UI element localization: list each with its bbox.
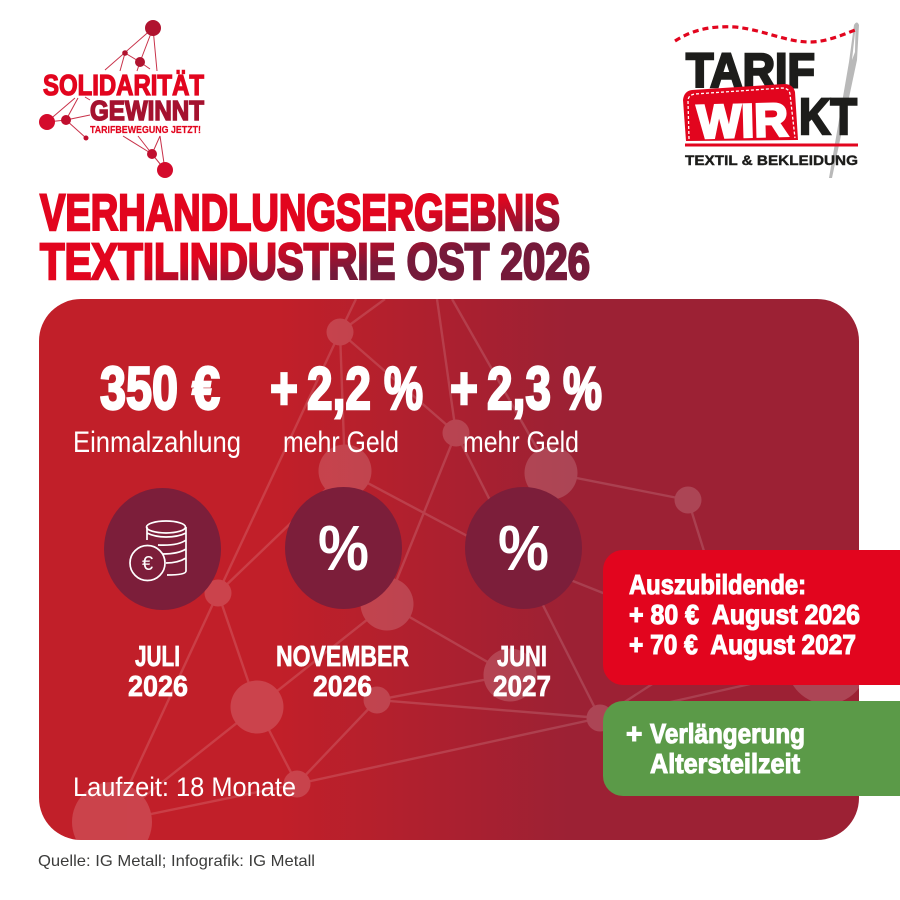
column: June 2027: 2027 [493, 671, 551, 703]
icon: needle [829, 22, 859, 178]
icon: percent [285, 487, 402, 609]
column: November 2026: 2,2 [307, 355, 371, 422]
column: November 2026 [270, 355, 423, 703]
callout: apprentices: Auszubildende: [629, 569, 806, 600]
column: June 2027: mehr Geld [463, 426, 579, 459]
column: July 2026: € [192, 355, 220, 422]
column: November 2026: + [270, 355, 298, 422]
callout: apprentices [603, 550, 900, 685]
panel: main result [39, 299, 867, 862]
column: June 2027: + [450, 355, 478, 422]
logo: Tarif wirkt: TEXTIL & BEKLEIDUNG [685, 152, 858, 168]
column: June 2027 [450, 355, 602, 703]
callout: partial retirement [603, 701, 900, 796]
logo: Solidarität gewinnt: TARIFBEWEGUNG JETZT! [90, 125, 201, 136]
icon: percent: % [498, 512, 549, 584]
column: July 2026: 2026 [128, 671, 188, 703]
network background [72, 299, 867, 862]
column: November 2026: 2026 [313, 671, 372, 703]
column: June 2027: 2,3 [487, 355, 551, 422]
logo: Tarif wirkt [675, 22, 859, 178]
logo: Solidarität gewinnt: SOLIDARITÄT [43, 69, 204, 102]
icon: percent: % [318, 512, 369, 584]
callout: partial retirement: Altersteilzeit [650, 748, 800, 779]
logo: Tarif wirkt: KT [799, 88, 857, 145]
column: July 2026: JULI [135, 641, 180, 673]
column: June 2027: JUNI [497, 641, 547, 673]
source note: Quelle: IG Metall; Infografik: IG Metall [38, 853, 315, 870]
column: November 2026: % [384, 355, 423, 422]
logo: Solidarität gewinnt: GEWINNT [90, 95, 204, 126]
column: November 2026: NOVEMBER [276, 641, 409, 673]
logo: Tarif wirkt: WIR [696, 93, 789, 148]
title [40, 184, 590, 290]
column: July 2026 [73, 355, 241, 703]
column: July 2026: Einmalzahlung [73, 426, 241, 459]
title: VERHANDLUNGSERGEBNIS [40, 184, 560, 241]
term note: Laufzeit: 18 Monate [73, 772, 296, 802]
title: TEXTILINDUSTRIE OST 2026 [40, 233, 590, 290]
callout: apprentices: + 70 € August 2027 [629, 629, 856, 660]
column: June 2027: % [563, 355, 602, 422]
icon: coins: € [142, 553, 153, 575]
column: July 2026: 350 [100, 355, 178, 422]
column: November 2026: mehr Geld [283, 426, 399, 459]
icon: coins [104, 488, 221, 610]
callout: apprentices: + 80 € August 2026 [629, 599, 860, 630]
callout: partial retirement: + [626, 718, 642, 749]
icon: percent [465, 487, 582, 609]
logo: Solidarität gewinnt [39, 20, 204, 178]
logo: Tarif wirkt: TARIF [686, 45, 815, 98]
callout: partial retirement: Verlängerung [650, 718, 805, 749]
